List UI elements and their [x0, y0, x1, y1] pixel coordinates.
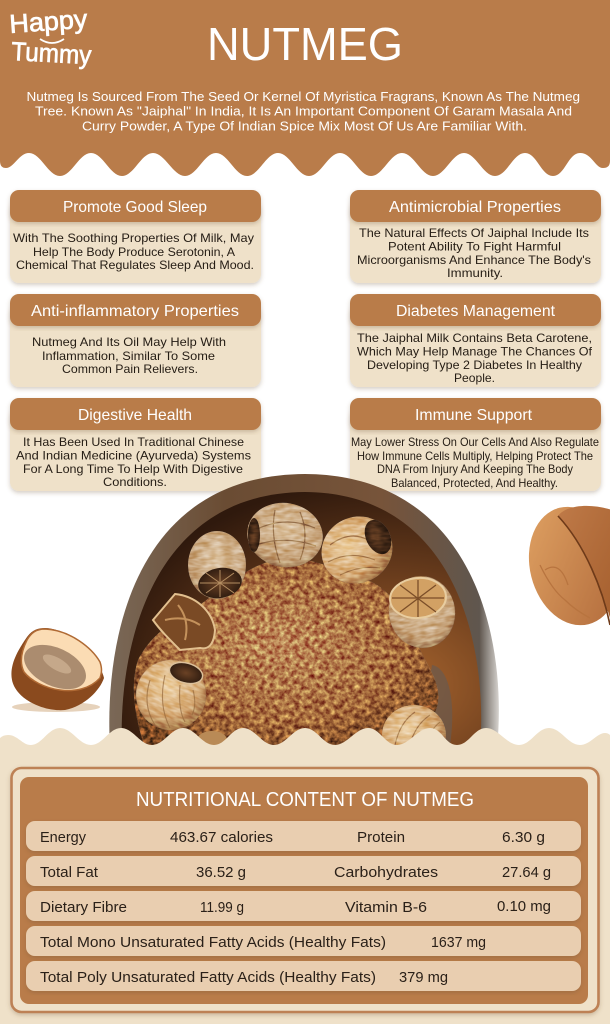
image: bowl of nutmeg and powder — [109, 474, 499, 765]
row: fat and carbohydrates — [26, 856, 581, 886]
powder mound — [134, 558, 439, 748]
card: Digestive Health — [10, 398, 261, 491]
card: Promote Good Sleep: With The Soothing Properties Of Milk, May — [13, 231, 254, 245]
header banner — [0, 0, 610, 176]
card: Anti-inflammatory Properties: Inflammation, Similar To Some — [42, 349, 215, 363]
bottom cream section — [0, 728, 610, 1024]
row: fat and carbohydrates: Total Fat — [40, 864, 99, 881]
nutmeg: right — [383, 571, 461, 653]
card: Antimicrobial Properties — [350, 190, 601, 283]
card: Diabetes Management: Developing Type 2 Diabetes In Healthy — [367, 358, 582, 372]
nutmeg: lower left — [126, 650, 216, 740]
logo: Happy Tummy — [8, 4, 92, 70]
title: NUTMEG — [207, 18, 403, 70]
card: Promote Good Sleep: Help The Body Produce Serotonin, A — [33, 245, 235, 259]
row: energy and protein — [26, 821, 581, 851]
nutmeg: upper left — [188, 531, 246, 602]
card: Diabetes Management: People. — [454, 371, 495, 385]
card: Anti-inflammatory Properties: Common Pain Relievers. — [62, 362, 198, 376]
row: poly unsaturated fats: 379 mg — [399, 969, 448, 986]
row: fat and carbohydrates: Carbohydrates — [334, 864, 438, 881]
row: energy and protein: 6.30 g — [502, 829, 545, 846]
card: Immune Support: DNA From Injury And Keeping The Body — [377, 462, 573, 476]
intro paragraph: Tree. Known As "Jaiphal" In India, It Is An Important Component Of Garam Masala And — [35, 104, 572, 118]
card: Antimicrobial Properties: The Natural Effects Of Jaiphal Include Its — [359, 226, 589, 240]
card: Immune Support: Immune Support — [415, 407, 533, 424]
nutmeg: partly hidden bottom — [197, 731, 227, 749]
card: Diabetes Management — [350, 294, 601, 387]
row: fibre and vitamin — [26, 891, 581, 921]
row: mono unsaturated fats: 1637 mg — [431, 934, 486, 951]
row: mono unsaturated fats — [26, 926, 581, 956]
card: Anti-inflammatory Properties: Anti-inflammatory Properties — [31, 303, 239, 320]
card: Antimicrobial Properties: Microorganisms And Enhance The Body's — [357, 253, 591, 267]
card: Digestive Health: And Indian Medicine (Ayurveda) Systems — [16, 448, 251, 462]
card: Digestive Health: Conditions. — [103, 475, 167, 489]
card: Anti-inflammatory Properties: Nutmeg And Its Oil May Help With — [32, 335, 226, 349]
card: Antimicrobial Properties: Potent Ability To Fight Harmful — [388, 240, 561, 254]
nutmeg: top center — [242, 497, 328, 573]
panel title: NUTRITIONAL CONTENT OF NUTMEG — [136, 789, 474, 811]
card: Promote Good Sleep — [10, 190, 261, 283]
card: Antimicrobial Properties: Immunity. — [447, 266, 503, 280]
nutmeg: cut slice — [153, 594, 215, 650]
icon: whole nutmeg — [517, 497, 610, 635]
row: fat and carbohydrates: 36.52 g — [196, 864, 246, 881]
card: Immune Support: How Immune Cells Multiply, Helping Protect The — [357, 449, 593, 463]
row: fibre and vitamin: Dietary Fibre — [40, 899, 127, 916]
intro paragraph: Curry Powder, A Type Of Indian Spice Mix Most Of Us Are Familiar With. — [82, 118, 527, 134]
logo: Happy Tummy: Happy — [8, 4, 88, 39]
card: Digestive Health: Digestive Health — [78, 407, 192, 424]
card: Digestive Health: It Has Been Used In Traditional Chinese — [23, 435, 244, 449]
card: Immune Support: Balanced, Protected, And Healthy. — [391, 476, 558, 490]
nutmeg: upper right — [310, 505, 404, 595]
row: fat and carbohydrates: 27.64 g — [502, 864, 551, 881]
icon: halved nutmeg — [11, 628, 104, 712]
card: Digestive Health: For A Long Time To Help With Digestive — [23, 462, 243, 476]
row: poly unsaturated fats: Total Poly Unsaturated Fatty Acids (Healthy Fats) — [40, 969, 376, 986]
row: fibre and vitamin: 11.99 g — [200, 899, 244, 916]
card: Promote Good Sleep: Chemical That Regulates Sleep And Mood. — [16, 258, 254, 272]
row: energy and protein: Energy — [40, 829, 86, 846]
card: Diabetes Management: The Jaiphal Milk Contains Beta Carotene, — [357, 331, 592, 345]
card: Immune Support — [350, 398, 601, 491]
card: Anti-inflammatory Properties — [10, 294, 261, 387]
intro paragraph — [26, 89, 580, 134]
card: Antimicrobial Properties: Antimicrobial Properties — [389, 199, 561, 216]
card: Diabetes Management: Which May Help Manage The Chances Of — [357, 344, 593, 358]
row: mono unsaturated fats: Total Mono Unsaturated Fatty Acids (Healthy Fats) — [40, 934, 386, 951]
card: Promote Good Sleep: Promote Good Sleep — [63, 199, 207, 216]
nutrition panel — [12, 768, 598, 1012]
row: poly unsaturated fats — [26, 961, 581, 991]
card: Diabetes Management: Diabetes Management — [396, 303, 556, 320]
nutmeg: lower right — [382, 705, 446, 765]
row: fibre and vitamin: Vitamin B-6 — [345, 899, 427, 916]
row: energy and protein: Protein — [357, 829, 405, 846]
row: energy and protein: 463.67 calories — [170, 829, 273, 846]
row: fibre and vitamin: 0.10 mg — [497, 898, 551, 915]
intro paragraph: Nutmeg Is Sourced From The Seed Or Kernel Of Myristica Fragrans, Known As The Nutmeg — [26, 89, 580, 104]
logo: Happy Tummy: Tummy — [11, 36, 92, 70]
